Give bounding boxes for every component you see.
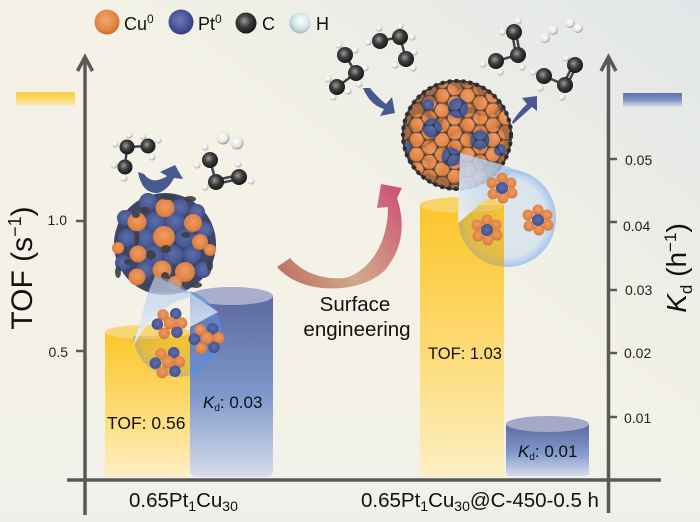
right axis tick labels — [623, 152, 652, 426]
y axis title: TOF: −1 — [5, 216, 25, 237]
molecule: product left — [194, 132, 254, 190]
right axis tick labels: 0.02 — [624, 345, 651, 361]
text: surface engineering: engineering — [303, 318, 411, 341]
left axis tick labels: 0.5 — [49, 344, 68, 360]
right axis tick labels: 0.03 — [625, 282, 652, 298]
cluster right — [189, 323, 224, 354]
bar label Kd 0.01: d — [529, 452, 535, 463]
legend swatch: Kd blue — [623, 93, 682, 107]
bar: TOF 1.03 — [420, 197, 504, 477]
right axis tick labels: 0.04 — [623, 218, 650, 234]
y axis title: TOF: ) — [6, 206, 39, 216]
nanoparticle: left — [112, 193, 216, 295]
legend: atom types: Cu — [124, 14, 147, 34]
molecule: hydrogen pairs — [540, 18, 583, 43]
bar label Kd 0.01: : 0.01 — [535, 442, 577, 461]
y axis title: Kd: d — [677, 285, 696, 294]
magnifier: left — [133, 276, 224, 378]
legend swatch: TOF yellow — [16, 92, 75, 106]
x label: 0.65Pt1Cu30: 1 — [188, 498, 196, 514]
left axis tick labels: 1.0 — [48, 212, 67, 228]
nanoparticle: right (carbon shell) — [399, 78, 515, 193]
x label: 0.65Pt1Cu30: Cu — [196, 489, 222, 512]
cluster top — [152, 308, 187, 339]
right axis tick labels: 0.01 — [624, 410, 651, 426]
y axis title: Kd: −1 — [661, 233, 680, 252]
bar label Kd 0.03: : 0.03 — [220, 393, 262, 412]
y axis title: Kd: K — [661, 293, 692, 313]
molecule: product right 1 — [480, 18, 526, 76]
x label: 0.65Pt1Cu30@C-450-0.5 h: 30 — [454, 498, 470, 514]
x axis — [67, 478, 661, 482]
x label: 0.65Pt1Cu30@C-450-0.5 h: @C-450-0.5 h — [470, 489, 599, 512]
molecule: reactant right 1 — [324, 42, 368, 100]
text: surface engineering — [303, 293, 411, 341]
molecule: reactant right 2 — [364, 22, 418, 72]
legend: atom types: H — [316, 14, 329, 34]
left axis tick labels — [48, 212, 68, 360]
right axis: Kd — [601, 57, 617, 513]
bar label TOF 0.56: TOF: 0.56 — [107, 413, 185, 433]
y axis title: TOF: TOF (s — [6, 237, 39, 330]
cluster bottom — [472, 214, 502, 246]
y axis title: Kd: ) — [661, 223, 692, 233]
x label: 0.65Pt1Cu30@C-450-0.5 h: Cu — [428, 489, 454, 512]
arrow: left blue curved — [138, 165, 183, 193]
x label: 0.65Pt1Cu30@C-450-0.5 h: 1 — [420, 498, 428, 514]
x label: 0.65Pt1Cu30: 30 — [222, 498, 238, 514]
x label: 0.65Pt1Cu30: 0.65Pt — [129, 489, 188, 512]
bar label Kd 0.03: d — [214, 403, 220, 414]
right axis tick labels: 0.05 — [625, 152, 652, 168]
arrow: right product — [512, 96, 537, 124]
molecule: product right 2 — [530, 54, 583, 100]
bar: Kd 0.01 — [506, 416, 589, 476]
molecule: reactant left — [110, 132, 162, 182]
legend: atom types: 0 — [147, 12, 154, 26]
cluster top — [486, 172, 518, 204]
arrow: right reactant — [363, 88, 395, 116]
legend: atom types: C — [262, 14, 275, 34]
legend: atom types — [94, 10, 329, 34]
arrow: surface engineering — [277, 184, 402, 288]
bar: Kd 0.03 — [190, 287, 273, 477]
cluster right — [522, 204, 554, 236]
cluster bottom — [150, 347, 185, 378]
bar label Kd 0.01: K — [518, 442, 530, 461]
text: surface engineering: Surface — [320, 293, 390, 316]
y axis title: Kd: (h — [661, 252, 692, 285]
bar: TOF 0.56 — [105, 325, 190, 477]
legend: atom types: 0 — [215, 12, 222, 26]
bar label Kd 0.03: K — [203, 393, 215, 412]
x label: 0.65Pt1Cu30@C-450-0.5 h: 0.65Pt — [361, 489, 420, 512]
legend: atom types: Pt — [198, 14, 215, 34]
left axis: TOF — [76, 57, 92, 515]
magnifier: right — [458, 153, 556, 267]
bar label TOF 1.03: TOF: 1.03 — [428, 345, 502, 363]
